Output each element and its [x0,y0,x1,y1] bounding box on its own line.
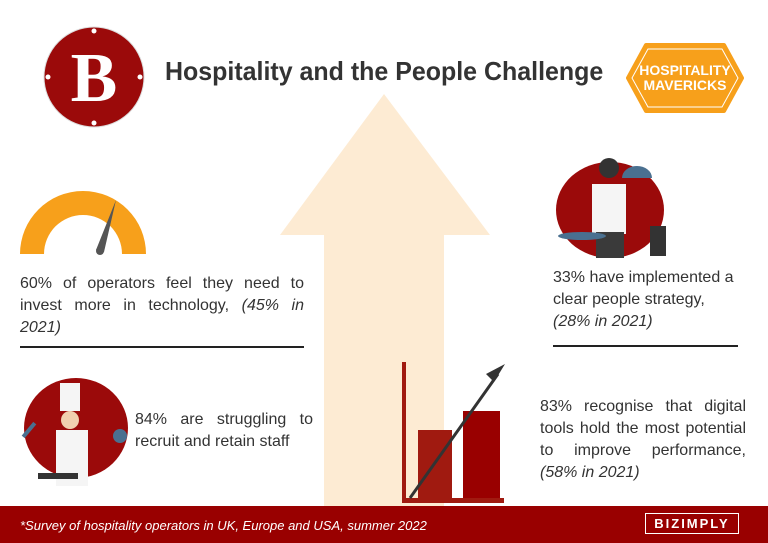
logo: B clock: B [71,40,117,117]
footnote: *Survey of hospitality operators in UK, Europe and USA, summer 2022 [20,518,427,533]
title: Hospitality and the People Challenge [165,56,603,86]
text: technology stat [20,275,304,336]
footer [0,506,768,543]
text: recruit stat: 84% are struggling to [135,411,313,428]
logo: Bizimply [645,513,739,534]
text: people strategy [553,269,734,330]
icon: gauge [20,191,146,255]
illustration: chef [22,378,128,486]
text: digital tools stat: to improve performance, [540,442,746,459]
logo: Hospitality Mavericks: HOSPITALITY [639,62,731,78]
text: digital tools stat: 83% recognise that digital [540,398,746,415]
text: people strategy: 33% have implemented a [553,269,734,286]
logo: Bizimply: BIZIMPLY [654,516,730,531]
text: technology stat: 2021) [20,319,61,336]
text: digital tools stat [540,398,746,481]
text: people strategy: clear people strategy, [553,291,705,308]
text: technology stat: invest more in technology, (45% in [20,297,304,314]
illustration: waitress [556,158,666,258]
bar chart with arrow [402,362,505,503]
text: digital tools stat: tools hold the most potential [540,420,746,437]
text: people strategy: (28% in 2021) [553,313,653,330]
text: recruit stat: recruit and retain staff [135,433,289,450]
logo: Hospitality Mavericks [626,43,744,113]
logo: B clock [44,26,144,128]
logo: Hospitality Mavericks: MAVERICKS [644,77,726,93]
text: recruit stat [135,411,313,450]
text: technology stat: 60% of operators feel they need to [20,275,304,292]
text: digital tools stat: (58% in 2021) [540,464,640,481]
